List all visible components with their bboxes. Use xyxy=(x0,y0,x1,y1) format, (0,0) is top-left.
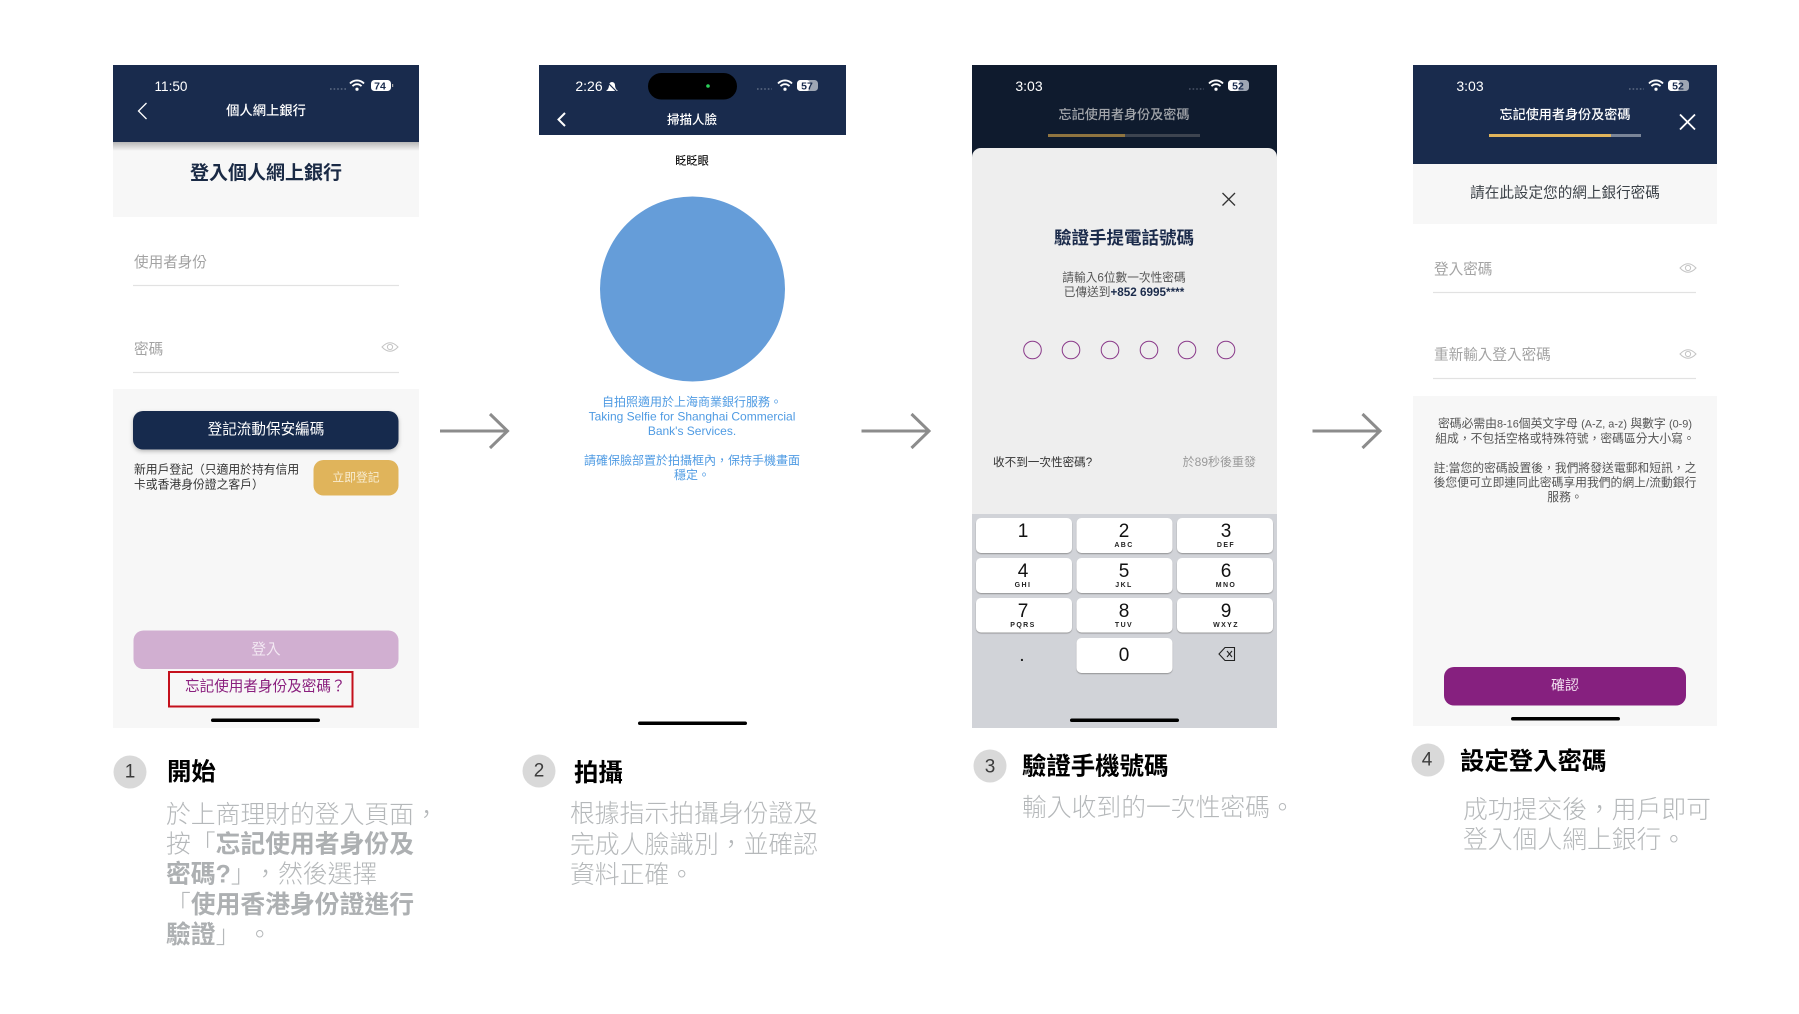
status icons: 57 xyxy=(801,80,813,92)
step description: 輸入收到的一次性密碼。 xyxy=(1022,794,1295,822)
home indicator xyxy=(211,718,320,722)
step title: 開始 xyxy=(167,759,216,786)
progress bar xyxy=(1048,134,1200,137)
panel: phone screen 4 set password xyxy=(1413,65,1717,726)
numeric keypad: 2 xyxy=(1119,521,1129,542)
numeric keypad: ABC xyxy=(1114,542,1134,549)
step description: 按「忘記使用者身份及 xyxy=(166,832,414,858)
password rules: 組成，不包括空格或特殊符號，密碼區分大小寫。 xyxy=(1435,432,1695,446)
password rules: 服務。 xyxy=(1547,490,1583,504)
status time: 11:50 xyxy=(154,79,188,94)
nav title: 忘記使用者身份及密碼 xyxy=(1500,106,1630,122)
selfie notice: Bank's Services. xyxy=(648,424,736,438)
step 2 label xyxy=(522,754,818,889)
selfie notice: 請確保臉部置於拍攝框內，保持手機畫面 xyxy=(584,452,800,468)
step title: 設定登入密碼 xyxy=(1460,748,1606,776)
numeric keypad: WXYZ xyxy=(1213,622,1239,629)
status icons xyxy=(1189,80,1249,92)
field: password: 密碼 xyxy=(134,341,163,358)
step description: 成功提交後，用戶即可 xyxy=(1463,796,1711,824)
numeric keypad: 3 xyxy=(1221,521,1231,542)
resend row xyxy=(993,454,1256,469)
icon: back chevron xyxy=(138,103,146,119)
arrow 1 xyxy=(440,414,508,448)
face scan circle xyxy=(600,196,785,382)
number badge xyxy=(114,756,146,788)
field: confirm password: 重新輸入登入密碼 xyxy=(1434,346,1551,364)
button: login disabled xyxy=(134,630,398,669)
home indicator xyxy=(1511,717,1620,720)
new user note: 新用戶登記（只適用於持有信用 xyxy=(134,462,299,476)
selfie notice: Taking Selfie for Shanghai Commercial xyxy=(589,410,795,424)
heading: 請在此設定您的網上銀行密碼 xyxy=(1470,184,1660,202)
step description: 驗證」 。 xyxy=(166,922,272,949)
numeric keypad: 0 xyxy=(1119,645,1129,666)
OTP sent message: 請輸入6位數一次性密碼 xyxy=(1062,270,1186,284)
numeric keypad: 8 xyxy=(1119,601,1129,622)
panel: phone screen 1 login xyxy=(113,65,419,728)
numeric keypad: 7 xyxy=(1018,601,1028,622)
instruction blink: 眨眨眼 xyxy=(675,154,709,168)
dynamic island xyxy=(648,73,737,100)
status time: 2:26 xyxy=(575,78,603,94)
button: register now xyxy=(314,460,398,496)
selfie notice: 穩定。 xyxy=(674,467,710,482)
number badge: 3 xyxy=(985,756,995,778)
password rules: 註:當您的密碼設置後，我們將發送電郵和短訊，之 xyxy=(1434,461,1697,475)
OTP circles xyxy=(1024,341,1235,359)
button: confirm xyxy=(1444,667,1686,706)
status icons: 74 xyxy=(374,80,386,92)
nav bar xyxy=(1413,65,1717,164)
step 1 label xyxy=(114,756,439,949)
numeric keypad: 4 xyxy=(1018,561,1029,582)
button: confirm: 確認 xyxy=(1551,677,1579,693)
number badge xyxy=(1412,744,1444,776)
number badge xyxy=(522,754,556,788)
field: login password: 登入密碼 xyxy=(1434,261,1492,278)
nav title: 個人網上銀行 xyxy=(226,103,306,118)
button: register mobile token xyxy=(133,411,398,450)
step title: 拍攝 xyxy=(574,760,623,787)
step description: ， xyxy=(253,862,278,888)
heading: 驗證手提電話號碼 xyxy=(1054,228,1194,248)
step description: 密碼?」 xyxy=(166,862,256,888)
nav title: 忘記使用者身份及密碼 xyxy=(1059,106,1189,122)
numeric keypad xyxy=(972,514,1277,728)
button: login disabled: 登入 xyxy=(251,641,281,658)
numeric keypad: JKL xyxy=(1115,582,1133,589)
status icons: 52 xyxy=(1672,80,1684,92)
step description: 資料正確。 xyxy=(570,861,694,889)
numeric keypad: 5 xyxy=(1119,561,1129,582)
step description: 根據指示拍攝身份證及 xyxy=(570,800,818,828)
numeric keypad: TUV xyxy=(1115,622,1133,629)
nav bar xyxy=(972,65,1277,160)
step title: 驗證手機號碼 xyxy=(1022,752,1168,780)
field: login password xyxy=(1433,261,1696,292)
new user note: 卡或香港身份證之客戶） xyxy=(134,478,264,492)
OTP sent message: 已傳送到+852 6995**** xyxy=(1064,286,1184,299)
panel: phone screen 3 OTP xyxy=(972,65,1277,728)
icon: silent bell xyxy=(606,81,618,92)
numeric keypad: 9 xyxy=(1221,601,1231,622)
numeric keypad: . xyxy=(1020,648,1024,664)
step description: 登入個人網上銀行。 xyxy=(1463,826,1686,854)
password rules: 密碼必需由8-16個英文字母 (A-Z, a-z) 與數字 (0-9) xyxy=(1438,416,1692,430)
icon: backspace xyxy=(1219,648,1234,660)
home indicator xyxy=(1070,718,1179,722)
button: register now: 立即登記 xyxy=(332,470,380,484)
button: register mobile token: 登記流動保安編碼 xyxy=(208,421,324,438)
number badge: 4 xyxy=(1422,750,1433,770)
heading: 登入個人網上銀行 xyxy=(190,162,342,184)
arrow 2 xyxy=(862,414,929,448)
nav bar xyxy=(539,65,846,135)
field: password xyxy=(133,341,399,372)
number badge: 1 xyxy=(125,762,135,782)
icon: close xyxy=(1680,114,1695,130)
callout: forgot id and password: 忘記使用者身份及密碼？ xyxy=(185,678,346,695)
nav bar xyxy=(113,65,419,142)
callout: forgot id and password xyxy=(169,672,352,706)
field: user id: 使用者身份 xyxy=(134,254,207,271)
password rules: 後您便可立即連同此密碼享用我們的網上/流動銀行 xyxy=(1434,476,1697,490)
resend row: 於89秒後重發 xyxy=(1183,454,1256,469)
numeric keypad: 6 xyxy=(1221,561,1231,582)
numeric keypad: PQRS xyxy=(1010,622,1036,629)
number badge: 2 xyxy=(534,760,544,782)
status icons xyxy=(1629,80,1689,92)
icon: back chevron xyxy=(558,113,565,126)
number badge xyxy=(974,750,1006,782)
step description: 於上商理財的登入頁面， xyxy=(166,801,439,829)
numeric keypad: MNO xyxy=(1216,582,1236,589)
status time: 3:03 xyxy=(1456,78,1484,94)
arrow 3 xyxy=(1312,414,1380,448)
resend row: 收不到一次性密碼? xyxy=(993,455,1093,469)
step 3 label xyxy=(974,750,1295,822)
status icons xyxy=(330,80,393,92)
step description: 然後選擇 xyxy=(278,860,377,888)
status time: 3:03 xyxy=(1015,78,1043,94)
status icons xyxy=(757,80,818,92)
field: confirm password xyxy=(1433,346,1696,378)
panel: phone screen 2 face scan xyxy=(539,65,846,725)
selfie notice: 自拍照適用於上海商業銀行服務。 xyxy=(602,394,782,409)
step 4 label xyxy=(1412,744,1711,854)
home indicator xyxy=(638,722,747,725)
sheet xyxy=(972,148,1277,514)
step description: 「使用香港身份證進行 xyxy=(166,892,414,919)
numeric keypad: 1 xyxy=(1018,521,1028,542)
icon: close xyxy=(1222,193,1235,206)
nav title: 掃描人臉 xyxy=(667,112,717,127)
numeric keypad: DEF xyxy=(1217,542,1235,549)
step description: 完成人臉識別，並確認 xyxy=(570,831,818,859)
status icons: 52 xyxy=(1232,80,1244,92)
progress bar xyxy=(1489,134,1641,137)
numeric keypad: GHI xyxy=(1015,582,1031,589)
